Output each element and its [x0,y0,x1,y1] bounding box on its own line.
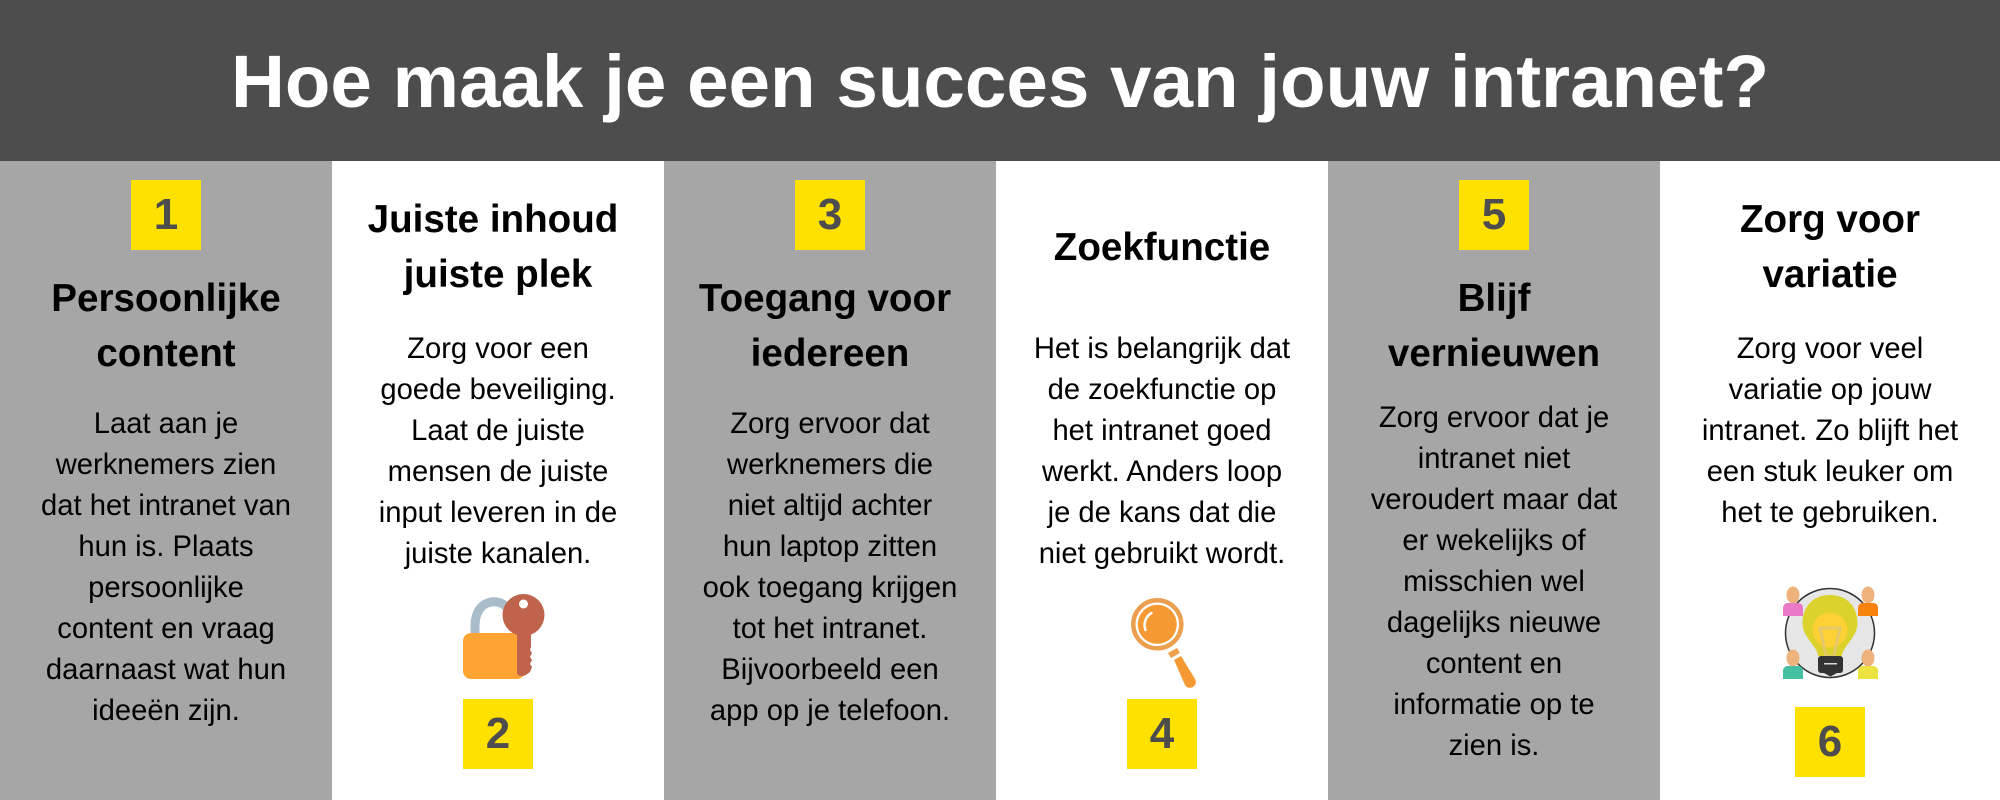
text column 1 [41,408,291,727]
text column 1: persoonlijke [88,572,244,604]
text column 3: Bijvoorbeeld een [721,654,939,686]
text column 6 [1702,333,1958,529]
text column 2: mensen de juiste [388,456,608,488]
text column 4: werkt. Anders loop [1042,456,1282,488]
text column 4: niet gebruikt wordt. [1039,538,1285,570]
number badge 2 [463,699,533,769]
heading column 2: Juiste inhoud [368,198,618,241]
text column 5: veroudert maar dat [1371,484,1617,516]
number badge 3: 3 [818,190,842,239]
text column 1: content en vraag [57,613,275,645]
text column 1: daarnaast wat hun [46,654,286,686]
text column 4: het intranet goed [1052,415,1272,447]
text column 1: hun is. Plaats [78,531,254,563]
text column 5: zien is. [1449,730,1539,762]
text column 1: dat het intranet van [41,490,291,522]
text column 3 [703,408,957,727]
number badge 5 [1459,180,1529,250]
text column 5: Zorg ervoor dat je [1379,402,1609,434]
text column 3: Zorg ervoor dat [730,408,930,440]
heading column 2: juiste plek [404,252,592,296]
heading column 5 [1388,277,1600,374]
text column 2: Zorg voor een [407,333,589,365]
text column 5: intranet niet [1418,443,1570,475]
text column 6: variatie op jouw [1729,374,1931,406]
text column 4: je de kans dat die [1048,497,1276,529]
number badge 1: 1 [154,190,178,239]
text column 3: ook toegang krijgen [703,572,957,604]
heading column 5: Blijf [1458,277,1530,320]
text column 1: ideeën zijn. [92,695,240,727]
text column 3: tot het intranet. [733,613,927,645]
text column 6: het te gebruiken. [1721,497,1939,529]
heading column 6: variatie [1762,252,1898,296]
number badge 3 [795,180,865,250]
text column 4: Het is belangrijk dat [1034,333,1290,365]
text column 2: Laat de juiste [411,415,585,447]
title: Hoe maak je een succes van jouw intranet? [231,39,1769,123]
icon: padlock and key [463,594,544,679]
heading column 2 [368,198,618,296]
text column 5: dagelijks nieuwe [1387,607,1601,639]
heading column 3: iedereen [751,332,909,374]
icon: light bulb with people [1783,586,1878,679]
text column 6: Zorg voor veel [1737,333,1923,365]
heading column 3: Toegang voor [699,277,951,320]
number badge 4 [1127,699,1197,769]
icon: magnifying glass [1131,598,1196,688]
panel: column 3 background [664,161,996,800]
heading column 1 [51,277,281,374]
number badge 2: 2 [486,709,510,758]
text column 5: misschien wel [1403,566,1585,598]
text column 2 [379,333,617,570]
text column 2: input leveren in de [379,497,617,529]
text column 5: content en [1426,648,1562,680]
number badge 4: 4 [1150,709,1174,758]
number badge 1 [131,180,201,250]
text column 5: informatie op te [1393,689,1595,721]
text column 1: werknemers zien [56,449,276,481]
text column 6: een stuk leuker om [1707,456,1953,488]
heading column 1: content [96,332,236,374]
text column 5: er wekelijks of [1402,525,1586,557]
text column 5 [1370,402,1617,762]
text column 6: intranet. Zo blijft het [1702,415,1958,447]
heading column 4: Zoekfunctie [1054,226,1270,269]
heading column 6 [1740,198,1920,296]
text column 3: hun laptop zitten [723,531,937,563]
text column 4: de zoekfunctie op [1048,374,1276,406]
number badge 5: 5 [1482,190,1506,239]
text column 4 [1034,333,1290,570]
text column 3: app op je telefoon. [710,695,950,727]
number badge 6 [1795,707,1865,777]
heading column 3 [699,277,951,374]
text column 3: werknemers die [727,449,933,481]
panel: column 5 background [1328,161,1660,800]
panel: column 1 background [0,161,332,800]
heading column 5: vernieuwen [1388,332,1600,374]
text column 3: niet altijd achter [728,490,932,522]
header band [0,0,2000,161]
text column 1: Laat aan je [94,408,238,440]
heading column 1: Persoonlijke [51,277,281,320]
text column 2: goede beveiliging. [380,374,616,406]
heading column 6: Zorg voor [1740,198,1920,241]
number badge 6: 6 [1818,717,1842,766]
text column 2: juiste kanalen. [405,538,591,570]
